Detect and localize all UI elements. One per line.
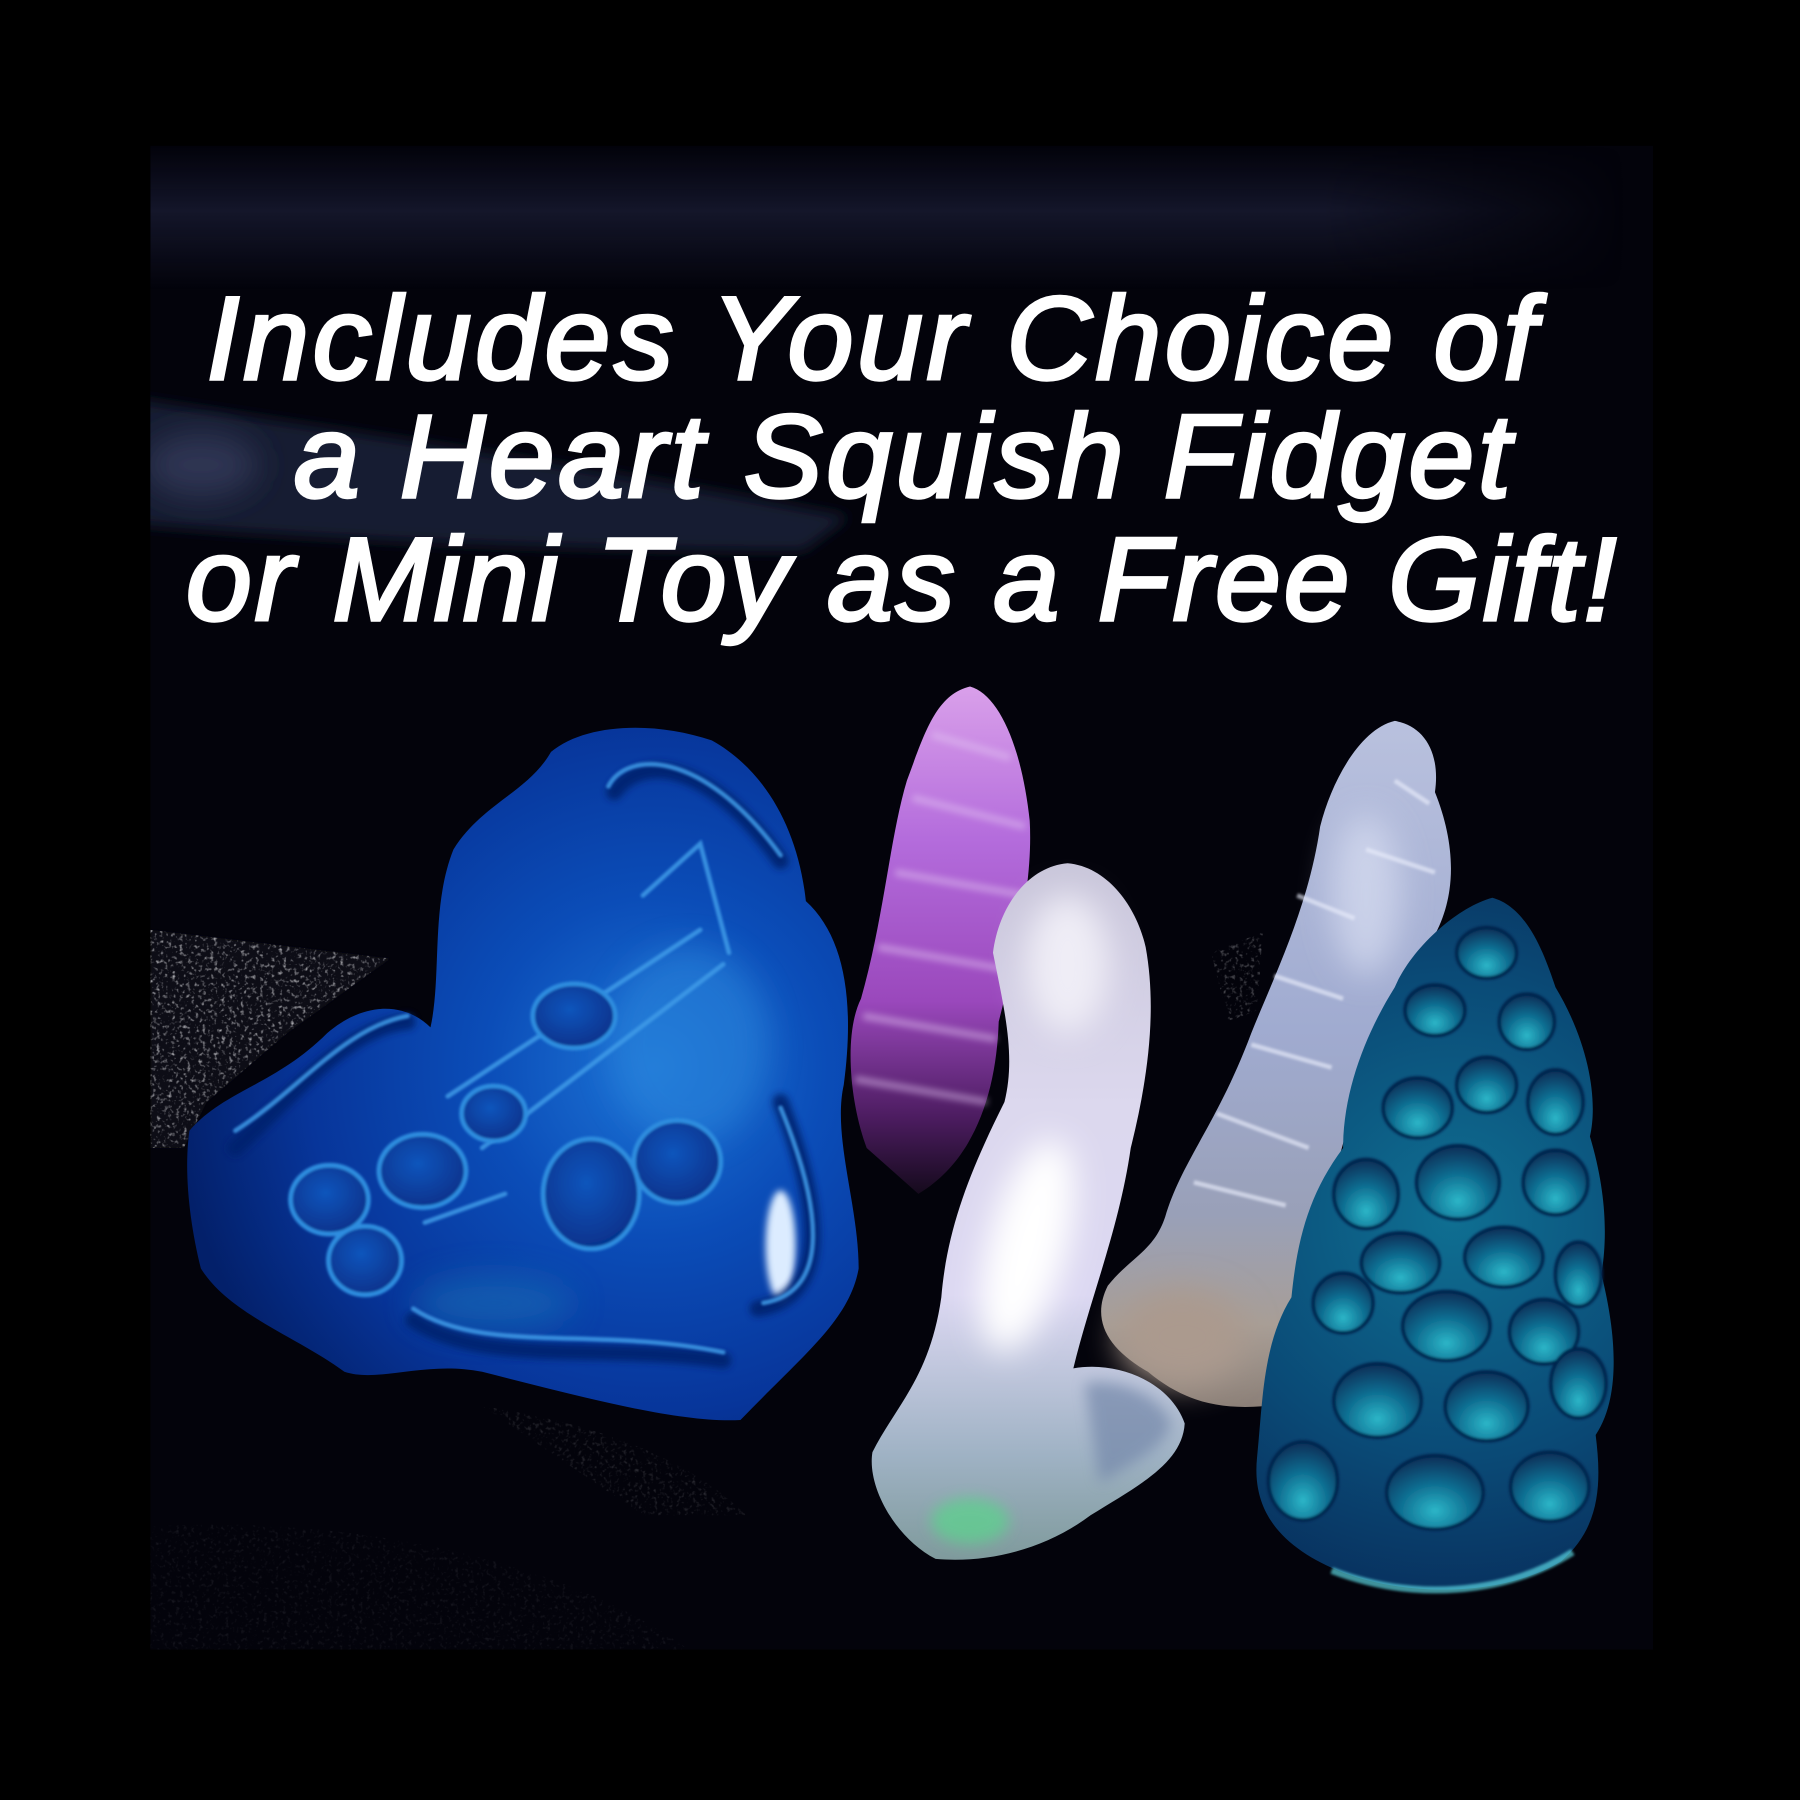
embossed curls on heart <box>290 984 721 1295</box>
headline line 3: or Mini Toy as a Free Gift! <box>186 514 1616 646</box>
title: free gift headline <box>186 273 1616 646</box>
icon: purple spiral mini toy <box>851 686 1030 1194</box>
panel: product photo <box>115 146 1653 1650</box>
icon: blue heart squish fidget <box>187 728 859 1420</box>
icon: rear white textured mini toy <box>1101 721 1451 1407</box>
textured fabric left <box>150 930 1263 1650</box>
icon: front white pearlescent mini toy <box>872 863 1185 1560</box>
icon: teal scaled mini toy <box>1256 898 1614 1590</box>
headline line 1: Includes Your Choice of <box>207 273 1547 405</box>
dark fabric background <box>150 163 1541 557</box>
headline line 2: a Heart Squish Fidget <box>294 391 1515 523</box>
